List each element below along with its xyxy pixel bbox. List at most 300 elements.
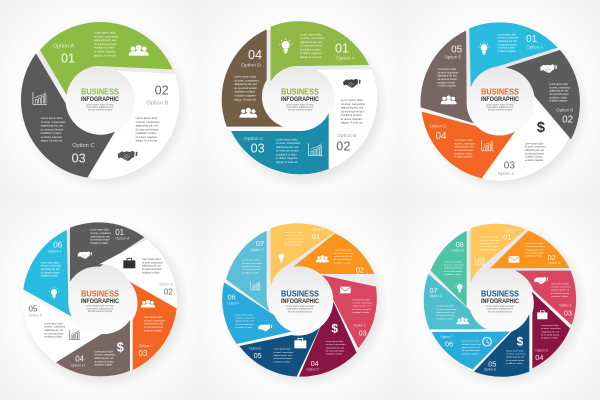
number: 03 [72,152,86,166]
text block: adipisicing elit, sed [549,90,569,93]
text block: et dolore magnam [234,93,257,97]
text block: Lorem ipsum dolor [41,116,63,120]
text block: sit amet, consectetur [90,232,111,235]
text block: adipisicing elit, sed [235,320,254,323]
option label: Option C [354,323,367,327]
number: 07 [430,286,438,295]
text block: Lorem ipsum dolor [276,137,298,141]
option label: Option E [445,55,462,60]
icon: people [129,45,149,56]
number: 04 [535,353,543,362]
text block: do eiusmod tempor [136,127,159,131]
center title [81,289,119,313]
icon: clock [483,337,491,346]
text block: et dolore magnam [454,156,473,159]
text block: adipisicing elit, sed [480,242,499,245]
text block: do eiusmod tempor [326,349,344,352]
option label: Option D [70,363,85,367]
text block: sit amet, consectetur [326,343,346,346]
option label: Option F [227,301,239,305]
text block: sit amet, consectetur [142,261,163,264]
option label: Option D [429,123,447,128]
icon: people [141,300,155,308]
text block: do eiusmod tempor [506,359,525,362]
text block: do eiusmod tempor [90,239,110,242]
number: 04 [75,355,85,364]
segment 05: Option E [23,293,102,361]
number: 02 [164,288,173,297]
text block: Lorem ipsum dolor [334,249,352,252]
center title: INFOGRAPHIC [281,298,319,305]
icon: people [456,317,469,324]
center title: BUSINESS [481,87,519,97]
text block: Lorem ipsum dolor [144,316,163,319]
number: 01 [503,233,511,242]
text block: incididunt ut labor [436,317,454,320]
text block: incididunt ut labor [341,113,362,117]
icon: dollar: $ [117,341,124,355]
option label: Option B [548,261,560,265]
text block: incididunt ut labor [273,360,291,363]
icon: briefcase [537,311,547,319]
text block: sit amet, consectetur [541,327,561,330]
text block: adipisicing elit, sed [498,40,517,43]
icon: handshake [118,151,138,161]
center title: BUSINESS [81,289,119,299]
center title: INFOGRAPHIC [481,96,519,103]
number: 04 [311,359,319,368]
text block: adipisicing elit, sed [444,267,463,270]
text block: Lorem ipsum dolor [454,139,473,142]
text block: et dolore magnam [300,51,322,55]
text block: incididunt ut labor [276,152,297,156]
center title: BUSINESS [281,289,319,299]
text block: et dolore magnam [525,159,543,162]
text block: Lorem ipsum dolor [235,313,253,316]
text block: do eiusmod tempor [44,332,64,335]
number: 04 [435,131,447,142]
segment 04: Option D [222,29,283,127]
text block: et dolore magnam [498,50,516,53]
icon: handshake [78,251,92,259]
text block: do eiusmod tempor [551,292,570,295]
text block: sit amet, consectetur [41,265,62,268]
number: 01 [312,232,320,241]
center title: sed do eiusmod tempor [88,310,112,313]
option label: Option C [559,304,573,308]
option label: Option E [484,368,496,372]
center title [81,87,119,112]
option label: Option A [52,43,74,49]
text block: adipisicing elit, sed [326,346,345,349]
text block: incididunt ut labor [525,156,543,159]
number: 03 [564,308,572,317]
text block: Lorem ipsum dolor [498,33,517,36]
text block: do eiusmod tempor [94,360,114,363]
option label: Option B [146,100,169,106]
segment 01: Option A [40,22,173,95]
text block: Lorem ipsum dolor [341,98,363,102]
text block: do eiusmod tempor [144,326,164,329]
text block: adipisicing elit, sed [334,255,353,258]
icon: chart [251,281,261,290]
center title: consectetur adipiscing elit, [486,308,514,311]
option label: Option C [72,143,94,149]
text block: adipisicing elit, sed [94,357,114,360]
text block: et dolore magnam [94,49,116,53]
text block: adipisicing elit, sed [506,356,525,359]
text block: sit amet, consectetur [276,141,301,145]
text block: incididunt ut labor [438,81,456,84]
option label: Option A [336,55,356,61]
center title: INFOGRAPHIC [481,298,519,305]
text block: do eiusmod tempor [142,268,162,271]
text block: do eiusmod tempor [498,43,517,46]
number: 05 [29,305,38,314]
text block: sit amet, consectetur [273,351,294,354]
text block: adipisicing elit, sed [462,346,481,349]
text block: et dolore magnam [276,156,298,160]
text block: incididunt ut labor [300,47,321,51]
segment 01: Option A [271,21,369,82]
text block: do eiusmod tempor [525,152,545,155]
option label: Option D [241,62,261,68]
text block: do eiusmod tempor [541,333,560,336]
text block: sit amet, consectetur [462,343,482,346]
text block: do eiusmod tempor [41,127,64,131]
icon: handshake [534,277,548,284]
icon: people [316,255,329,262]
center title: consectetur adipiscing elit, [286,308,314,311]
number: 05 [254,351,262,360]
text block: sit amet, consectetur [525,245,546,248]
text block: sit amet, consectetur [300,36,325,40]
number: 05 [451,45,463,56]
text block: Lorem ipsum dolor [242,259,260,262]
option label: Option C [244,136,264,142]
text block: adipisicing elit, sed [234,82,257,86]
text block: incididunt ut labor [94,46,115,50]
center title: INFOGRAPHIC [281,96,319,103]
text block: do eiusmod tempor [341,109,364,113]
segment 02: Option B [505,50,580,139]
center title: sed do eiusmod tempor [288,310,312,313]
panel: five-step cycle [400,0,600,200]
icon: people [239,108,257,118]
text block: aliqua. Ut enim ad [136,139,158,143]
text block: do eiusmod tempor [41,271,60,274]
text block: Lorem ipsum dolor [94,31,116,35]
option label: Option F [440,335,452,339]
number: 06 [445,340,453,349]
panel: four-step cycle [200,0,400,200]
segment 03: Option C [231,113,329,174]
text block: Lorem ipsum dolor [41,261,60,264]
text block: Lorem ipsum dolor [549,83,568,86]
center title: Lorem ipsum dolor sit amet, [486,305,515,308]
segment 02: Option B [91,71,179,179]
center title: sed do eiusmod tempor [488,109,512,112]
text block: do eiusmod tempor [235,323,254,326]
text block: do eiusmod tempor [549,93,569,96]
text block: Lorem ipsum dolor [444,260,462,263]
text block: incididunt ut labor [551,295,568,298]
panel: eight-step cycle [400,200,600,400]
option label: Option A [526,44,543,49]
icon: briefcase [294,338,306,348]
segment 01: Option A [471,224,526,283]
text block: incididunt ut labor [142,271,160,274]
text block: Lorem ipsum dolor [136,116,158,120]
number: 01 [526,34,538,45]
segment 03: Option C [515,271,576,325]
text block: Lorem ipsum dolor [480,236,498,239]
panel: six-step cycle [0,200,200,400]
segment 06: Option F [23,230,72,317]
segment 01: Option A [271,223,334,287]
text block: incididunt ut labor [541,337,558,340]
icon: envelope [509,256,519,263]
text block: sit amet, consectetur [480,239,500,242]
icon: bulb [478,42,490,55]
text block: incididunt ut labor [444,273,461,276]
panel: three-step cycle [0,0,200,200]
text block: do eiusmod tempor [480,245,499,248]
icon: dollar: $ [517,334,524,348]
text block: do eiusmod tempor [438,78,457,81]
segment 02: Option B [315,69,377,168]
text block: sit amet, consectetur [525,146,546,149]
text block: adipisicing elit, sed [525,149,545,152]
segment 01: Option A [469,22,558,87]
center title: INFOGRAPHIC [81,96,119,103]
text block: incididunt ut labor [41,131,62,135]
text block: incididunt ut labor [525,255,543,258]
text block: aliqua. Ut enim ad [276,160,298,164]
text block: do eiusmod tempor [352,308,371,311]
center title: Lorem ipsum dolor sit amet, [286,305,315,308]
text block: incididunt ut labor [352,311,370,314]
segment 03: Option C [322,275,377,348]
option label: Option H [451,249,465,253]
text block: do eiusmod tempor [300,44,323,48]
segment 04: Option D [422,112,515,178]
number: 06 [53,240,63,249]
center title: consectetur adipiscing elit, [86,307,114,310]
center title: BUSINESS [281,87,319,97]
number: 03 [359,329,367,338]
segment 04: Option D [56,320,130,376]
number: 04 [248,48,262,62]
text block: sit amet, consectetur [444,263,464,266]
option label: Option C [498,171,515,176]
center title: INFOGRAPHIC [81,298,119,305]
icon: bulb [49,287,59,298]
text block: incididunt ut labor [41,275,59,278]
segment 02: Option B [293,233,374,277]
text block: sit amet, consectetur [506,352,526,355]
text block: adipisicing elit, sed [41,268,60,271]
center title: consectetur adipiscing elit, [486,106,514,109]
option label: Option G [430,294,443,298]
text block: do eiusmod tempor [525,251,544,254]
light streak [568,138,584,154]
text block: do eiusmod tempor [276,149,299,153]
option label: Option E [249,346,261,350]
number: 02 [336,139,350,153]
text block: adipisicing elit, sed [41,124,63,128]
text block: incididunt ut labor [506,362,523,365]
text block: sit amet, consectetur [454,142,475,145]
text block: Lorem ipsum dolor [436,305,454,308]
text block: do eiusmod tempor [285,240,304,243]
center title: sed do eiusmod tempor [488,310,512,313]
icon: envelope [340,287,351,293]
segment 06: Option F [432,332,510,369]
number: 02 [548,253,556,262]
text block: adipisicing elit, sed [285,237,304,240]
text block: aliqua. Ut enim ad [41,139,63,143]
center title: Lorem ipsum dolor sit amet, [86,305,115,308]
text block: do eiusmod tempor [462,349,480,352]
text block: adipisicing elit, sed [136,124,158,128]
segment 01: Option A [70,222,144,282]
text block: do eiusmod tempor [242,268,261,271]
text block: Lorem ipsum dolor [285,231,303,234]
text block: adipisicing elit, sed [436,311,455,314]
option label: Option E [28,314,43,318]
number: 08 [456,240,464,249]
icon: bulb [277,252,286,262]
text block: Lorem ipsum dolor [438,68,457,71]
text block: incididunt ut labor [326,353,343,356]
text block: sit amet, consectetur [285,234,305,237]
center title: Lorem ipsum dolor sit amet, [86,103,115,106]
text block: Lorem ipsum dolor [506,349,524,352]
number: 03 [139,349,148,358]
text block: aliqua. Ut enim ad [94,53,116,57]
text block: Lorem ipsum dolor [142,258,161,261]
center title: sed do eiusmod tempor [88,109,112,112]
text block: sit amet, consectetur [438,71,459,74]
text block: aliqua. Ut enim ad [234,97,256,101]
text block: Lorem ipsum dolor [352,298,370,301]
segment 03: Option C [485,97,567,181]
text block: sit amet, consectetur [136,120,160,124]
text block: do eiusmod tempor [334,258,353,261]
segment 04: Option D [532,292,570,368]
number: 02 [155,83,169,97]
text block: sit amet, consectetur [44,326,65,329]
text block: adipisicing elit, sed [273,354,292,357]
segment 08: Option H [431,231,467,307]
text block: incididunt ut labor [454,152,472,155]
segment 05: Option E [474,314,529,377]
icon: briefcase [123,258,135,268]
icon: chart [33,92,47,104]
center title [481,289,519,313]
segment 02: Option B [490,231,569,268]
number: 01 [61,52,75,66]
text block: incididunt ut labor [234,90,255,94]
segment 04: Option D [299,302,357,377]
center title: BUSINESS [81,87,119,97]
text block: Lorem ipsum dolor [462,340,480,343]
text block: adipisicing elit, sed [352,305,371,308]
text block: do eiusmod tempor [454,149,474,152]
text block: incididunt ut labor [90,242,108,245]
segment 07: Option G [226,231,270,312]
text block: adipisicing elit, sed [142,265,162,268]
text block: Lorem ipsum dolor [94,350,113,353]
text block: Lorem ipsum dolor [90,229,109,232]
text block: adipisicing elit, sed [94,38,117,42]
text block: Lorem ipsum dolor [541,324,559,327]
segment 03: Option C [21,53,115,178]
text block: sit amet, consectetur [551,285,571,288]
text block: incididunt ut labor [498,47,516,50]
option label: Option B [556,107,573,112]
text block: do eiusmod tempor [94,42,117,46]
icon: dollar: $ [331,321,338,335]
text block: sit amet, consectetur [498,37,519,40]
light streak [570,328,587,344]
option label: Option A [505,228,518,232]
text block: adipisicing elit, sed [438,75,457,78]
text block: adipisicing elit, sed [454,146,474,149]
text block: incididunt ut labor [94,364,112,367]
text block: incididunt ut labor [242,271,259,274]
center title: sed do eiusmod tempor [288,109,312,112]
icon: bulb [455,282,464,293]
option label: Option D [535,348,549,352]
text block: incididunt ut labor [462,352,479,355]
text block: et dolore magnam [549,100,568,103]
icon: chart [475,256,485,265]
icon: chart [69,330,80,339]
icon: chart [309,143,323,156]
text block: aliqua. Ut enim ad [341,121,363,125]
text block: incididunt ut labor [285,244,302,247]
number: 03 [251,142,265,156]
text block: Lorem ipsum dolor [234,75,256,79]
icon: bulb [279,38,292,53]
text block: et dolore magnam [438,85,456,88]
text block: do eiusmod tempor [436,314,455,317]
text block: adipisicing elit, sed [90,235,110,238]
number: 01 [115,228,125,237]
text block: sit amet, consectetur [41,120,65,124]
icon: people [441,96,457,104]
option label: Option A [312,228,325,232]
text block: sit amet, consectetur [144,319,165,322]
text block: incididunt ut labor [136,131,157,135]
text block: incididunt ut labor [235,326,253,329]
number: 03 [504,160,515,171]
text block: Lorem ipsum dolor [525,142,544,145]
icon: handshake [540,64,557,73]
number: 07 [256,239,264,248]
center title: BUSINESS [481,289,519,299]
center title: consectetur adipiscing elit, [86,106,114,109]
icon: handshake [258,324,272,331]
text block: Lorem ipsum dolor [273,348,291,351]
center title: Lorem ipsum dolor sit amet, [486,103,515,106]
text block: sit amet, consectetur [352,301,373,304]
text block: Lorem ipsum dolor [326,340,344,343]
text block: incididunt ut labor [480,248,497,251]
text block: aliqua. Ut enim ad [300,55,322,59]
